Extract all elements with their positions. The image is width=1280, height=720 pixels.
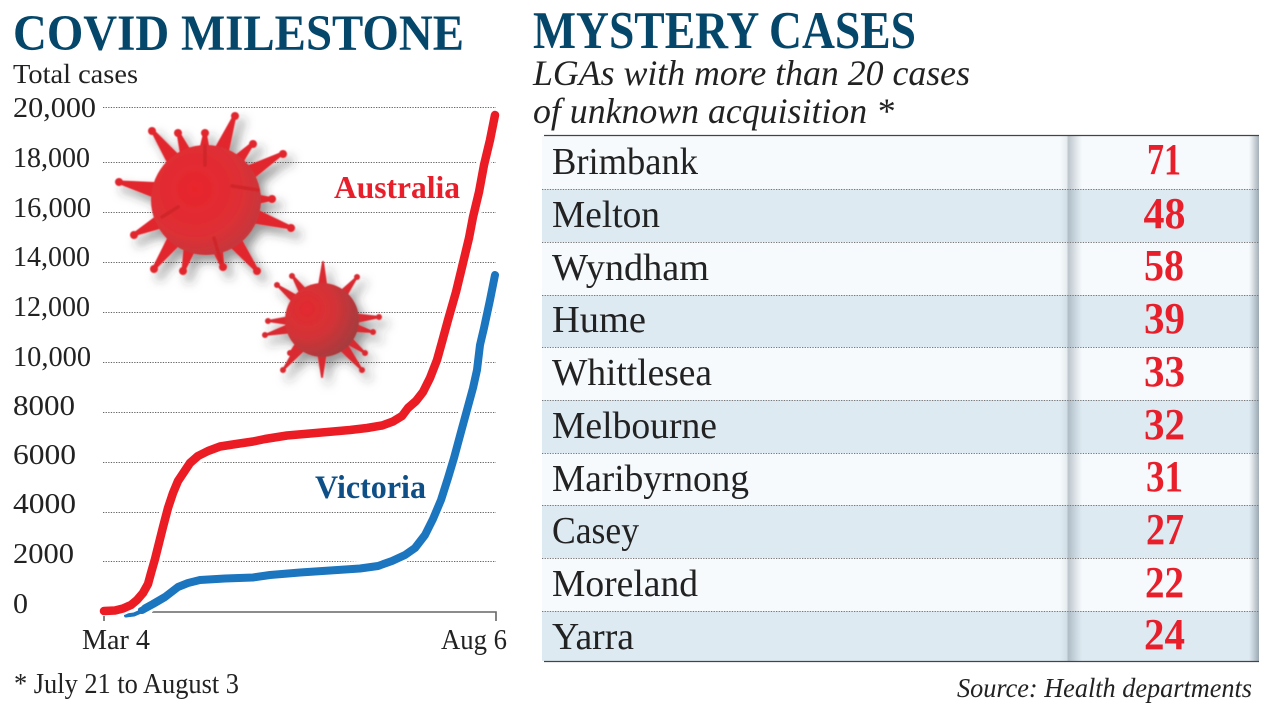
heading: covid milestone: COVID MILESTONE bbox=[13, 6, 464, 62]
y axis labels: 10,000 bbox=[13, 341, 91, 373]
row: wyndham: 58 bbox=[1144, 241, 1184, 290]
source note: Source: Health departments bbox=[957, 673, 1252, 703]
y axis labels bbox=[13, 92, 96, 620]
row: yarra: Yarra bbox=[552, 616, 634, 658]
row: yarra: 24 bbox=[1144, 610, 1185, 659]
subheading bbox=[532, 53, 970, 131]
y axis labels: 8000 bbox=[13, 390, 75, 422]
row: melton bbox=[552, 189, 1186, 238]
x label: mar 4: Mar 4 bbox=[82, 624, 150, 656]
row: whittlesea: 33 bbox=[1144, 347, 1185, 396]
y axis labels: 0 bbox=[13, 588, 28, 620]
row: melbourne: 32 bbox=[1144, 400, 1185, 449]
x label: aug 6: Aug 6 bbox=[441, 624, 507, 656]
row: brimbank: 71 bbox=[1147, 135, 1181, 184]
panel: mystery cases table bbox=[532, 2, 1259, 703]
icon: small virus bbox=[262, 262, 382, 377]
row: maribyrnong: Maribyrnong bbox=[552, 458, 749, 500]
axis title: total cases: Total cases bbox=[13, 59, 138, 89]
row: hume: Hume bbox=[552, 299, 646, 341]
row: brimbank: Brimbank bbox=[552, 141, 698, 183]
row: brimbank bbox=[552, 135, 1181, 184]
row: melbourne bbox=[552, 400, 1185, 449]
subheading: LGAs with more than 20 cases bbox=[532, 53, 970, 93]
row: maribyrnong bbox=[552, 452, 1183, 501]
row: casey: Casey bbox=[552, 510, 639, 552]
icon: large virus bbox=[115, 112, 295, 275]
row: wyndham bbox=[552, 241, 1184, 290]
row: melton: 48 bbox=[1144, 189, 1186, 238]
y axis labels: 4000 bbox=[13, 488, 76, 520]
panel: covid milestone chart bbox=[13, 6, 507, 700]
heading: mystery cases: MYSTERY CASES bbox=[533, 2, 916, 60]
y axis labels: 18,000 bbox=[13, 142, 90, 174]
line: australia bbox=[104, 115, 495, 611]
footnote: * July 21 to August 3 bbox=[14, 668, 239, 700]
x axis line and ticks bbox=[104, 612, 496, 621]
row: melbourne: Melbourne bbox=[552, 405, 717, 447]
row: hume: 39 bbox=[1144, 294, 1185, 343]
subheading: of unknown acquisition * bbox=[533, 91, 894, 131]
table rows background bbox=[542, 136, 1259, 661]
y axis labels: 12,000 bbox=[13, 291, 90, 323]
row: hume bbox=[552, 294, 1185, 343]
row: maribyrnong: 31 bbox=[1146, 452, 1183, 501]
row: yarra bbox=[552, 610, 1185, 659]
y axis labels: 2000 bbox=[13, 538, 74, 570]
row: moreland: 22 bbox=[1145, 558, 1184, 607]
y axis labels: 20,000 bbox=[13, 92, 96, 124]
row: casey bbox=[552, 505, 1184, 554]
row: moreland bbox=[552, 558, 1184, 607]
row: melton: Melton bbox=[552, 194, 660, 236]
row: whittlesea bbox=[552, 347, 1185, 396]
y axis labels: 16,000 bbox=[13, 192, 91, 224]
label: victoria: Victoria bbox=[315, 470, 426, 506]
row: casey: 27 bbox=[1146, 505, 1184, 554]
line: victoria bbox=[126, 275, 495, 616]
y axis labels: 14,000 bbox=[13, 241, 90, 273]
row: wyndham: Wyndham bbox=[552, 247, 709, 289]
y axis labels: 6000 bbox=[13, 439, 76, 471]
label: australia: Australia bbox=[334, 169, 460, 205]
row: whittlesea: Whittlesea bbox=[552, 352, 712, 394]
row: moreland: Moreland bbox=[552, 563, 698, 605]
